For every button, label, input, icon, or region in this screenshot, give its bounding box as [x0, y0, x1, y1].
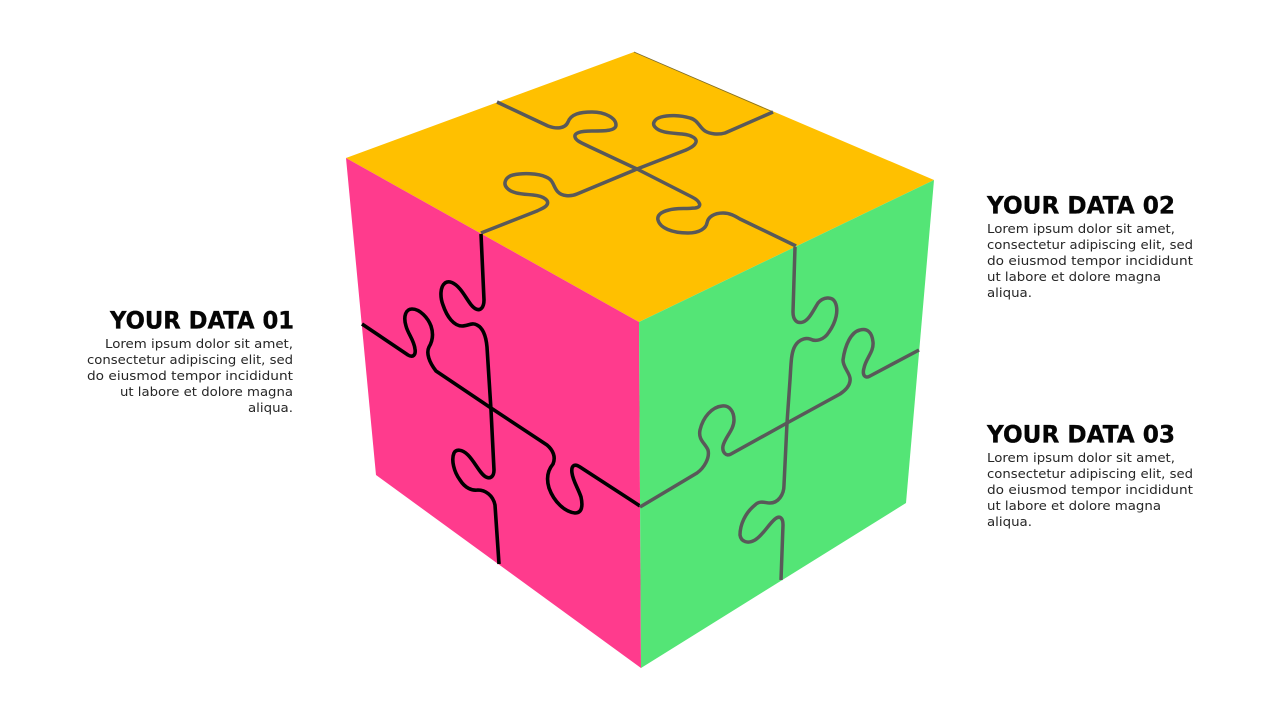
- body text: your data 02: aliqua.: [987, 285, 1032, 300]
- body text: your data 03: consectetur adipiscing elit, sed: [987, 466, 1193, 481]
- heading: your data 02: YOUR DATA 02: [986, 192, 1175, 220]
- body text: your data 03: Lorem ipsum dolor sit amet,: [987, 450, 1175, 465]
- panel: right face (green): [639, 180, 934, 668]
- panel: top face (yellow): [346, 52, 934, 322]
- heading: your data 01: YOUR DATA 01: [109, 306, 294, 334]
- body text: your data 01: Lorem ipsum dolor sit amet,: [105, 336, 293, 351]
- body text: your data 03: aliqua.: [987, 514, 1032, 529]
- body text: your data 01: consectetur adipiscing elit, sed: [87, 352, 293, 367]
- body text: your data 01: aliqua.: [248, 400, 293, 415]
- body text: your data 01: do eiusmod tempor incididunt: [87, 368, 293, 383]
- body text: your data 02: do eiusmod tempor incididunt: [987, 253, 1193, 268]
- text block: your data 01: [87, 306, 294, 415]
- body text: your data 02: ut labore et dolore magna: [987, 269, 1161, 284]
- body text: your data 02: [987, 221, 1193, 300]
- heading: your data 03: YOUR DATA 03: [986, 420, 1175, 448]
- text block: your data 02: [986, 192, 1193, 300]
- body text: your data 01: [87, 336, 293, 415]
- body text: your data 01: ut labore et dolore magna: [120, 384, 293, 399]
- puzzle cube: [346, 52, 934, 668]
- body text: your data 02: consectetur adipiscing elit, sed: [987, 237, 1193, 252]
- body text: your data 02: Lorem ipsum dolor sit amet,: [987, 221, 1175, 236]
- body text: your data 03: do eiusmod tempor incididunt: [987, 482, 1193, 497]
- text block: your data 03: [986, 420, 1193, 529]
- panel: left face (pink): [346, 158, 641, 668]
- body text: your data 03: ut labore et dolore magna: [987, 498, 1161, 513]
- body text: your data 03: [987, 450, 1193, 529]
